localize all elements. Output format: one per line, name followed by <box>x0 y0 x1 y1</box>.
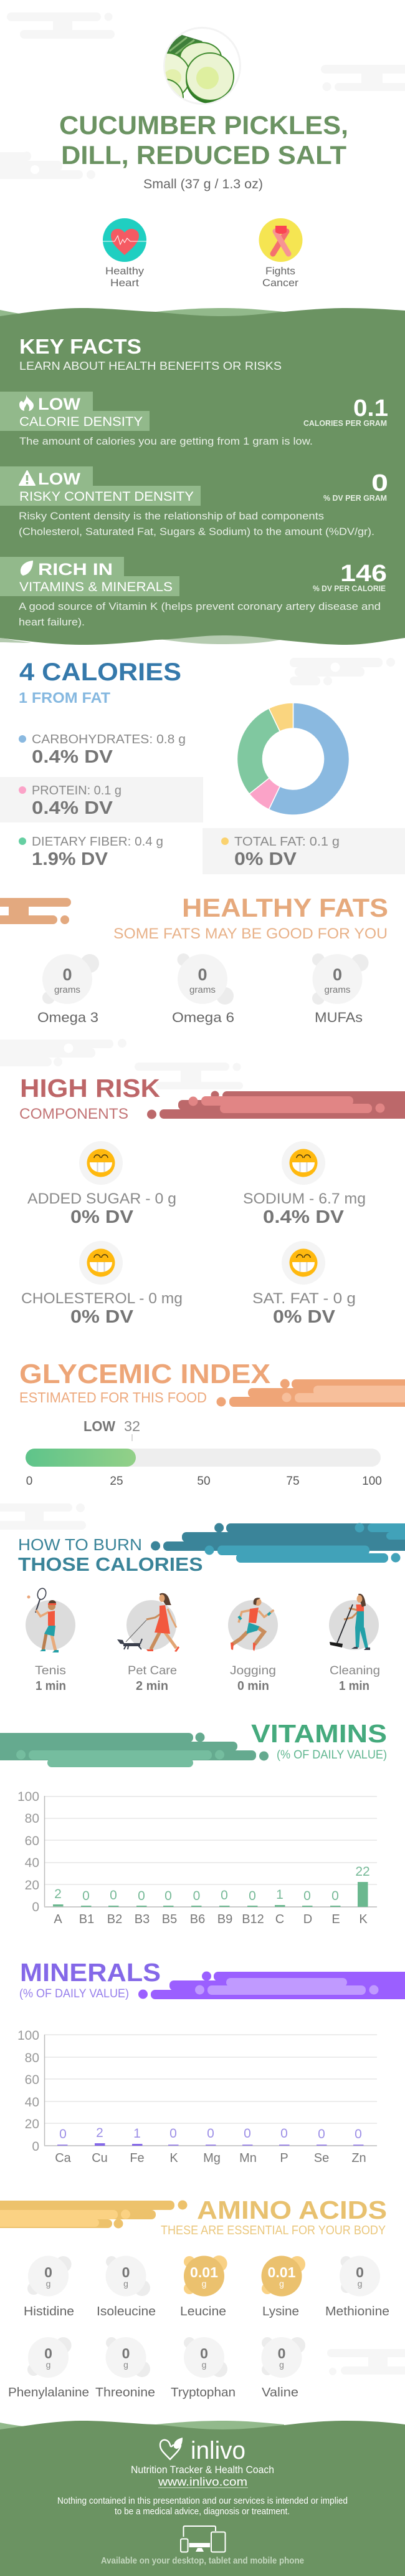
bar chart: vitamins: B6 <box>190 1913 205 1926</box>
bar chart: minerals: 60 <box>25 2073 39 2087</box>
bar chart: minerals: Mg <box>203 2151 221 2165</box>
bar chart: vitamins: A <box>54 1913 62 1926</box>
logo: inlivo: inlivo <box>191 2437 245 2464</box>
icon: grinning face <box>282 1141 325 1185</box>
heading: key facts <box>19 335 282 372</box>
amino: phenylalanine: g <box>46 2360 50 2370</box>
heading: glycemic index: ESTIMATED FOR THIS FOOD <box>19 1389 207 1406</box>
risk item: cholesterol: 0% DV <box>70 1307 134 1327</box>
risk item: cholesterol <box>21 1241 183 1327</box>
amino: leucine: g <box>202 2279 206 2289</box>
bar chart: minerals: 100 <box>17 2028 39 2043</box>
activity: cleaning: Cleaning <box>330 1664 380 1677</box>
gauge scale <box>26 1475 382 1488</box>
bar chart: vitamins: B1 <box>79 1913 94 1926</box>
fact: low risky content density: (Cholesterol, Saturated Fat, Sugars & Sodium) to the amount (%DV/gr). <box>19 526 374 538</box>
amino: leucine: 0.01 <box>190 2264 218 2280</box>
bar chart: minerals: 40 <box>25 2095 39 2110</box>
icon: devices <box>181 2526 226 2552</box>
gauge label: 32 <box>124 1418 140 1434</box>
risk item: sodium <box>243 1141 366 1227</box>
bar chart: vitamins: 40 <box>25 1856 39 1870</box>
bar chart: minerals: Se <box>314 2151 329 2165</box>
panel: amino acids <box>0 2196 389 2400</box>
amino: phenylalanine: Phenylalanine <box>8 2386 89 2400</box>
banner: glycemic index <box>217 1379 405 1407</box>
health badge: fights cancer <box>259 218 303 289</box>
amino: histidine: g <box>46 2279 50 2289</box>
heading: glycemic index: GLYCEMIC INDEX <box>19 1359 270 1389</box>
risk item: sodium: SODIUM - 6.7 mg <box>243 1190 366 1207</box>
heading: high risk: COMPONENTS <box>19 1106 128 1122</box>
amino: isoleucine <box>97 2256 156 2318</box>
bar chart: vitamins: 60 <box>25 1834 39 1848</box>
heading: minerals: MINERALS <box>20 1958 161 1987</box>
amino: leucine: Leucine <box>180 2305 226 2318</box>
icon: leaf <box>21 561 33 576</box>
amino: threonine: 0 <box>122 2345 130 2361</box>
icon: tennis player <box>27 1588 59 1652</box>
amino: methionine <box>325 2256 389 2318</box>
gauge scale: 25 <box>110 1475 123 1488</box>
fat: omega 3: 0 <box>62 965 72 984</box>
legend: total fat: 0% DV <box>234 849 297 869</box>
bar chart: vitamins: K <box>359 1913 368 1926</box>
amino: lysine <box>262 2256 305 2318</box>
fact: rich in vitamins and minerals <box>0 557 387 628</box>
panel: calories <box>0 658 405 874</box>
fat: omega 6 <box>172 953 234 1025</box>
donut chart <box>237 703 350 815</box>
bar chart: vitamins: 0 <box>164 1889 172 1903</box>
serving size: Small (37 g / 1.3 oz) <box>143 177 263 191</box>
legend: dietary fiber: 1.9% DV <box>32 849 108 869</box>
legend: protein: PROTEIN: 0.1 g <box>32 784 122 798</box>
heading: healthy fats <box>113 893 388 942</box>
fact: low calorie density: CALORIES PER GRAM <box>303 418 387 428</box>
fact: rich in vitamins and minerals: RICH IN <box>38 560 113 579</box>
bar chart: minerals: 0 <box>244 2126 251 2141</box>
availability note: Available on your desktop, tablet and mobile phone <box>101 2555 304 2566</box>
heading: key facts: KEY FACTS <box>19 335 141 358</box>
heading: vitamins: VITAMINS <box>251 1719 387 1748</box>
amino: valine: 0 <box>278 2345 285 2361</box>
disclaimer: to be a medical advice, diagnosis or treatment. <box>115 2506 290 2517</box>
risk item: added sugar <box>27 1141 176 1227</box>
bar chart: minerals: 0 <box>32 2139 39 2154</box>
fat: mufas: grams <box>324 985 350 995</box>
footer <box>0 2421 405 2576</box>
heading: vitamins <box>251 1719 387 1762</box>
banner: healthy fats <box>0 898 71 924</box>
bar chart: minerals: P <box>280 2151 288 2165</box>
fact: low risky content density: 0 <box>371 470 388 496</box>
bar chart: minerals: 0 <box>355 2127 362 2141</box>
tagline and url: www.inlivo.com <box>158 2476 247 2488</box>
fact: low calorie density: 0.1 <box>353 395 388 422</box>
amino: valine: g <box>279 2360 284 2370</box>
bar chart: minerals <box>17 2028 377 2165</box>
title: CUCUMBER PICKLES, <box>59 110 348 140</box>
bar chart: vitamins: 20 <box>25 1878 39 1893</box>
heading: minerals <box>19 1958 161 2000</box>
bar chart: vitamins: 22 <box>355 1864 370 1879</box>
legend: dietary fiber: DIETARY FIBER: 0.4 g <box>32 835 163 849</box>
banner: how to burn <box>151 1523 405 1563</box>
bar chart: minerals: 2 <box>96 2126 103 2140</box>
fact: low calorie density: CALORIE DENSITY <box>19 415 143 429</box>
amino: methionine: g <box>358 2279 362 2289</box>
legend: dietary fiber <box>19 835 163 869</box>
fat: mufas <box>312 953 369 1025</box>
heading: amino acids: AMINO ACIDS <box>197 2196 387 2224</box>
icon: person sweeping <box>330 1594 370 1650</box>
bar chart: minerals: Cu <box>92 2151 108 2165</box>
activity: pet care: Pet Care <box>128 1664 177 1677</box>
amino: lysine: Lysine <box>262 2305 299 2318</box>
fact: low risky content density <box>0 466 388 538</box>
amino: histidine <box>24 2256 74 2318</box>
bar chart: minerals: Fe <box>130 2151 145 2165</box>
fat: mufas: MUFAs <box>315 1010 363 1025</box>
fact: low calorie density <box>0 392 388 447</box>
panel: high risk components <box>19 1074 405 1327</box>
heading: high risk <box>19 1074 160 1122</box>
amino: isoleucine: Isoleucine <box>97 2305 156 2318</box>
banner: minerals <box>138 1972 405 1999</box>
risk item: added sugar: ADDED SUGAR - 0 g <box>27 1190 176 1207</box>
bar chart: vitamins <box>17 1790 377 1926</box>
bar chart: vitamins: D <box>303 1913 312 1926</box>
amino: lysine: 0.01 <box>268 2264 296 2280</box>
bar chart: vitamins: 0 <box>138 1889 145 1903</box>
bar chart: vitamins: 0 <box>221 1888 228 1903</box>
amino: isoleucine: 0 <box>122 2264 130 2280</box>
heading: amino acids: THESE ARE ESSENTIAL FOR YOUR BODY <box>161 2224 386 2237</box>
bar chart: vitamins: 2 <box>54 1887 62 1901</box>
panel: key facts <box>0 308 405 645</box>
amino: phenylalanine: 0 <box>44 2345 52 2361</box>
bar chart: minerals: 1 <box>133 2126 141 2141</box>
bar chart: minerals: K <box>169 2151 178 2165</box>
bar chart: vitamins: 0 <box>193 1889 200 1903</box>
fat: omega 6: grams <box>189 985 216 995</box>
bar chart: vitamins: 0 <box>303 1889 311 1903</box>
activity: tennis: Tenis <box>35 1664 66 1677</box>
panel: vitamins <box>0 1719 387 1926</box>
health badge: fights cancer: Cancer <box>262 277 298 289</box>
icon: jogger <box>231 1598 274 1651</box>
fact: rich in vitamins and minerals: % DV PER CALORIE <box>313 584 386 593</box>
amino: histidine: 0 <box>44 2264 52 2280</box>
amino: tryptophan <box>171 2337 236 2400</box>
fact: rich in vitamins and minerals: heart failure). <box>19 616 85 628</box>
bar chart: minerals: 80 <box>25 2051 39 2065</box>
heading: minerals: (% OF DAILY VALUE) <box>19 1987 129 2000</box>
bar chart: vitamins: B2 <box>107 1913 122 1926</box>
bar chart: vitamins: 0 <box>110 1888 117 1903</box>
fact: low risky content density: LOW <box>38 470 81 488</box>
bar chart: minerals: Zn <box>351 2151 366 2165</box>
bar chart: vitamins: 0 <box>82 1889 90 1903</box>
fact: low risky content density: RISKY CONTENT DENSITY <box>19 490 194 504</box>
bar chart: vitamins: 0 <box>249 1889 256 1903</box>
amino: lysine: g <box>279 2279 284 2289</box>
heading: 4 calories: 1 FROM FAT <box>19 690 110 707</box>
amino: threonine <box>95 2337 155 2400</box>
amino: tryptophan: 0 <box>200 2345 208 2361</box>
amino: phenylalanine <box>8 2337 89 2400</box>
activity: cleaning: 1 min <box>339 1679 369 1693</box>
health badge: healthy heart: Healthy <box>105 265 145 277</box>
food image: cucumber slices <box>163 27 241 105</box>
activity: jogging: Jogging <box>230 1664 276 1677</box>
gauge label <box>83 1418 140 1441</box>
amino: histidine: Histidine <box>24 2305 74 2318</box>
heading: healthy fats: SOME FATS MAY BE GOOD FOR YOU <box>113 925 388 942</box>
fat: omega 3: grams <box>54 985 80 995</box>
amino: threonine: Threonine <box>95 2386 155 2400</box>
fact: low calorie density: The amount of calories you are getting from 1 gram is low. <box>19 435 313 447</box>
health badge: healthy heart <box>103 218 146 289</box>
gauge scale: 0 <box>26 1475 32 1488</box>
fact: rich in vitamins and minerals: VITAMINS & MINERALS <box>19 580 173 594</box>
icon: grinning face <box>79 1141 123 1185</box>
heading: vitamins: (% OF DAILY VALUE) <box>277 1749 387 1762</box>
bar chart: vitamins: B9 <box>217 1913 232 1926</box>
fact: low risky content density: % DV PER GRAM <box>323 493 387 503</box>
disclaimer: Nothing contained in this presentation and our services is intended or implied <box>57 2496 348 2506</box>
banner: vitamins <box>0 1732 269 1767</box>
heading: high risk: HIGH RISK <box>20 1074 160 1102</box>
icon: flame <box>19 395 34 411</box>
activity: jogging: 0 min <box>237 1679 269 1693</box>
tagline and url <box>131 2464 274 2488</box>
panel: how to burn those calories <box>18 1523 405 1693</box>
panel: healthy fats <box>0 893 388 1025</box>
activity: tennis: 1 min <box>36 1679 66 1693</box>
bar chart: minerals: Mn <box>239 2151 257 2165</box>
risk item: added sugar: 0% DV <box>70 1207 134 1227</box>
activity: jogging <box>228 1598 278 1693</box>
fact: rich in vitamins and minerals: 146 <box>340 561 387 587</box>
heading: how to burn those calories: THOSE CALORIES <box>18 1553 203 1575</box>
amino: valine <box>262 2337 305 2400</box>
bar chart: vitamins: C <box>275 1913 284 1926</box>
health badge: healthy heart: Heart <box>110 277 139 289</box>
amino: threonine: g <box>123 2360 128 2370</box>
legend: protein: 0.4% DV <box>32 798 113 818</box>
bar chart: vitamins: E <box>331 1913 340 1926</box>
amino: valine: Valine <box>262 2386 298 2400</box>
disclaimer <box>57 2496 348 2517</box>
fat: omega 3 <box>37 954 99 1025</box>
risk item: cholesterol: CHOLESTEROL - 0 mg <box>21 1290 183 1307</box>
activity: tennis <box>26 1588 75 1693</box>
bar chart: minerals: 20 <box>25 2117 39 2131</box>
icon: heart on teal circle <box>103 218 146 262</box>
risk item: saturated fat <box>252 1241 356 1327</box>
bar chart: minerals: 0 <box>318 2127 325 2141</box>
bar chart: vitamins: 80 <box>25 1811 39 1826</box>
gauge scale: 100 <box>362 1475 382 1488</box>
bar chart: minerals: 0 <box>207 2126 214 2141</box>
risk item: saturated fat: SAT. FAT - 0 g <box>252 1290 356 1307</box>
bar chart: vitamins: 1 <box>276 1888 284 1902</box>
bar chart: minerals: 0 <box>59 2127 67 2141</box>
tagline and url: Nutrition Tracker & Health Coach <box>131 2464 274 2476</box>
fat: omega 3: Omega 3 <box>37 1010 98 1025</box>
amino: tryptophan: g <box>202 2360 206 2370</box>
bar chart: vitamins: 0 <box>331 1889 339 1903</box>
legend: carbohydrates <box>19 733 186 767</box>
legend: carbohydrates: 0.4% DV <box>32 747 113 767</box>
gauge scale: 75 <box>286 1475 300 1488</box>
bar chart: vitamins: 100 <box>17 1790 39 1804</box>
amino: isoleucine: g <box>123 2279 128 2289</box>
heading: key facts: LEARN ABOUT HEALTH BENEFITS OR RISKS <box>19 360 282 372</box>
heading: amino acids <box>161 2196 387 2237</box>
title: DILL, REDUCED SALT <box>61 140 346 170</box>
bar chart: vitamins: B5 <box>162 1913 177 1926</box>
amino: leucine <box>180 2255 227 2318</box>
title <box>59 110 348 170</box>
legend: total fat <box>221 835 340 869</box>
gauge bar <box>26 1449 381 1467</box>
amino: methionine: 0 <box>356 2264 364 2280</box>
activity: pet care <box>117 1593 179 1693</box>
bar chart: vitamins: 0 <box>32 1900 39 1914</box>
icon: woman walking dog <box>117 1593 179 1652</box>
fat: omega 6: 0 <box>198 965 207 984</box>
heading: 4 calories <box>19 658 181 707</box>
logo: inlivo <box>160 2437 245 2464</box>
risk item: saturated fat: 0% DV <box>273 1307 336 1327</box>
heading: healthy fats: HEALTHY FATS <box>182 893 388 922</box>
header: food title block <box>59 27 348 191</box>
bar chart: vitamins: B12 <box>242 1913 264 1926</box>
icon: warning triangle <box>19 471 35 485</box>
fat: mufas: 0 <box>333 965 342 984</box>
icon: grinning face <box>79 1241 123 1285</box>
bar chart: minerals: 0 <box>169 2126 177 2141</box>
panel: minerals <box>17 1958 405 2165</box>
fat: omega 6: Omega 6 <box>172 1010 234 1025</box>
heading: how to burn those calories <box>18 1535 203 1575</box>
banner: high risk <box>147 1091 405 1119</box>
bar chart: minerals: Ca <box>55 2151 72 2165</box>
legend: carbohydrates: CARBOHYDRATES: 0.8 g <box>32 733 186 746</box>
fact: low calorie density: LOW <box>38 395 81 413</box>
legend: total fat: TOTAL FAT: 0.1 g <box>234 835 340 849</box>
heading: how to burn those calories: HOW TO BURN <box>18 1535 142 1554</box>
activity: cleaning <box>329 1594 380 1693</box>
gauge label: LOW <box>83 1418 115 1434</box>
fact: rich in vitamins and minerals: A good source of Vitamin K (helps prevent coronary artery disease and <box>19 601 381 612</box>
bar chart: vitamins: B3 <box>135 1913 150 1926</box>
bar chart: minerals: 0 <box>280 2126 288 2141</box>
heading: 4 calories: 4 CALORIES <box>19 658 181 686</box>
risk item: sodium: 0.4% DV <box>263 1207 345 1227</box>
activity: pet care: 2 min <box>136 1679 168 1693</box>
icon: ribbon on yellow circle <box>259 218 303 262</box>
health badge: fights cancer: Fights <box>265 265 295 277</box>
amino: tryptophan: Tryptophan <box>171 2386 236 2400</box>
panel: glycemic index <box>19 1359 405 1488</box>
heading: glycemic index <box>19 1359 270 1406</box>
icon: grinning face <box>282 1241 325 1285</box>
amino: methionine: Methionine <box>325 2305 389 2318</box>
banner: amino acids <box>0 2200 187 2229</box>
fact: low risky content density: Risky Content density is the relationship of bad components <box>19 510 324 522</box>
legend: protein <box>19 784 122 818</box>
gauge scale: 50 <box>197 1475 211 1488</box>
